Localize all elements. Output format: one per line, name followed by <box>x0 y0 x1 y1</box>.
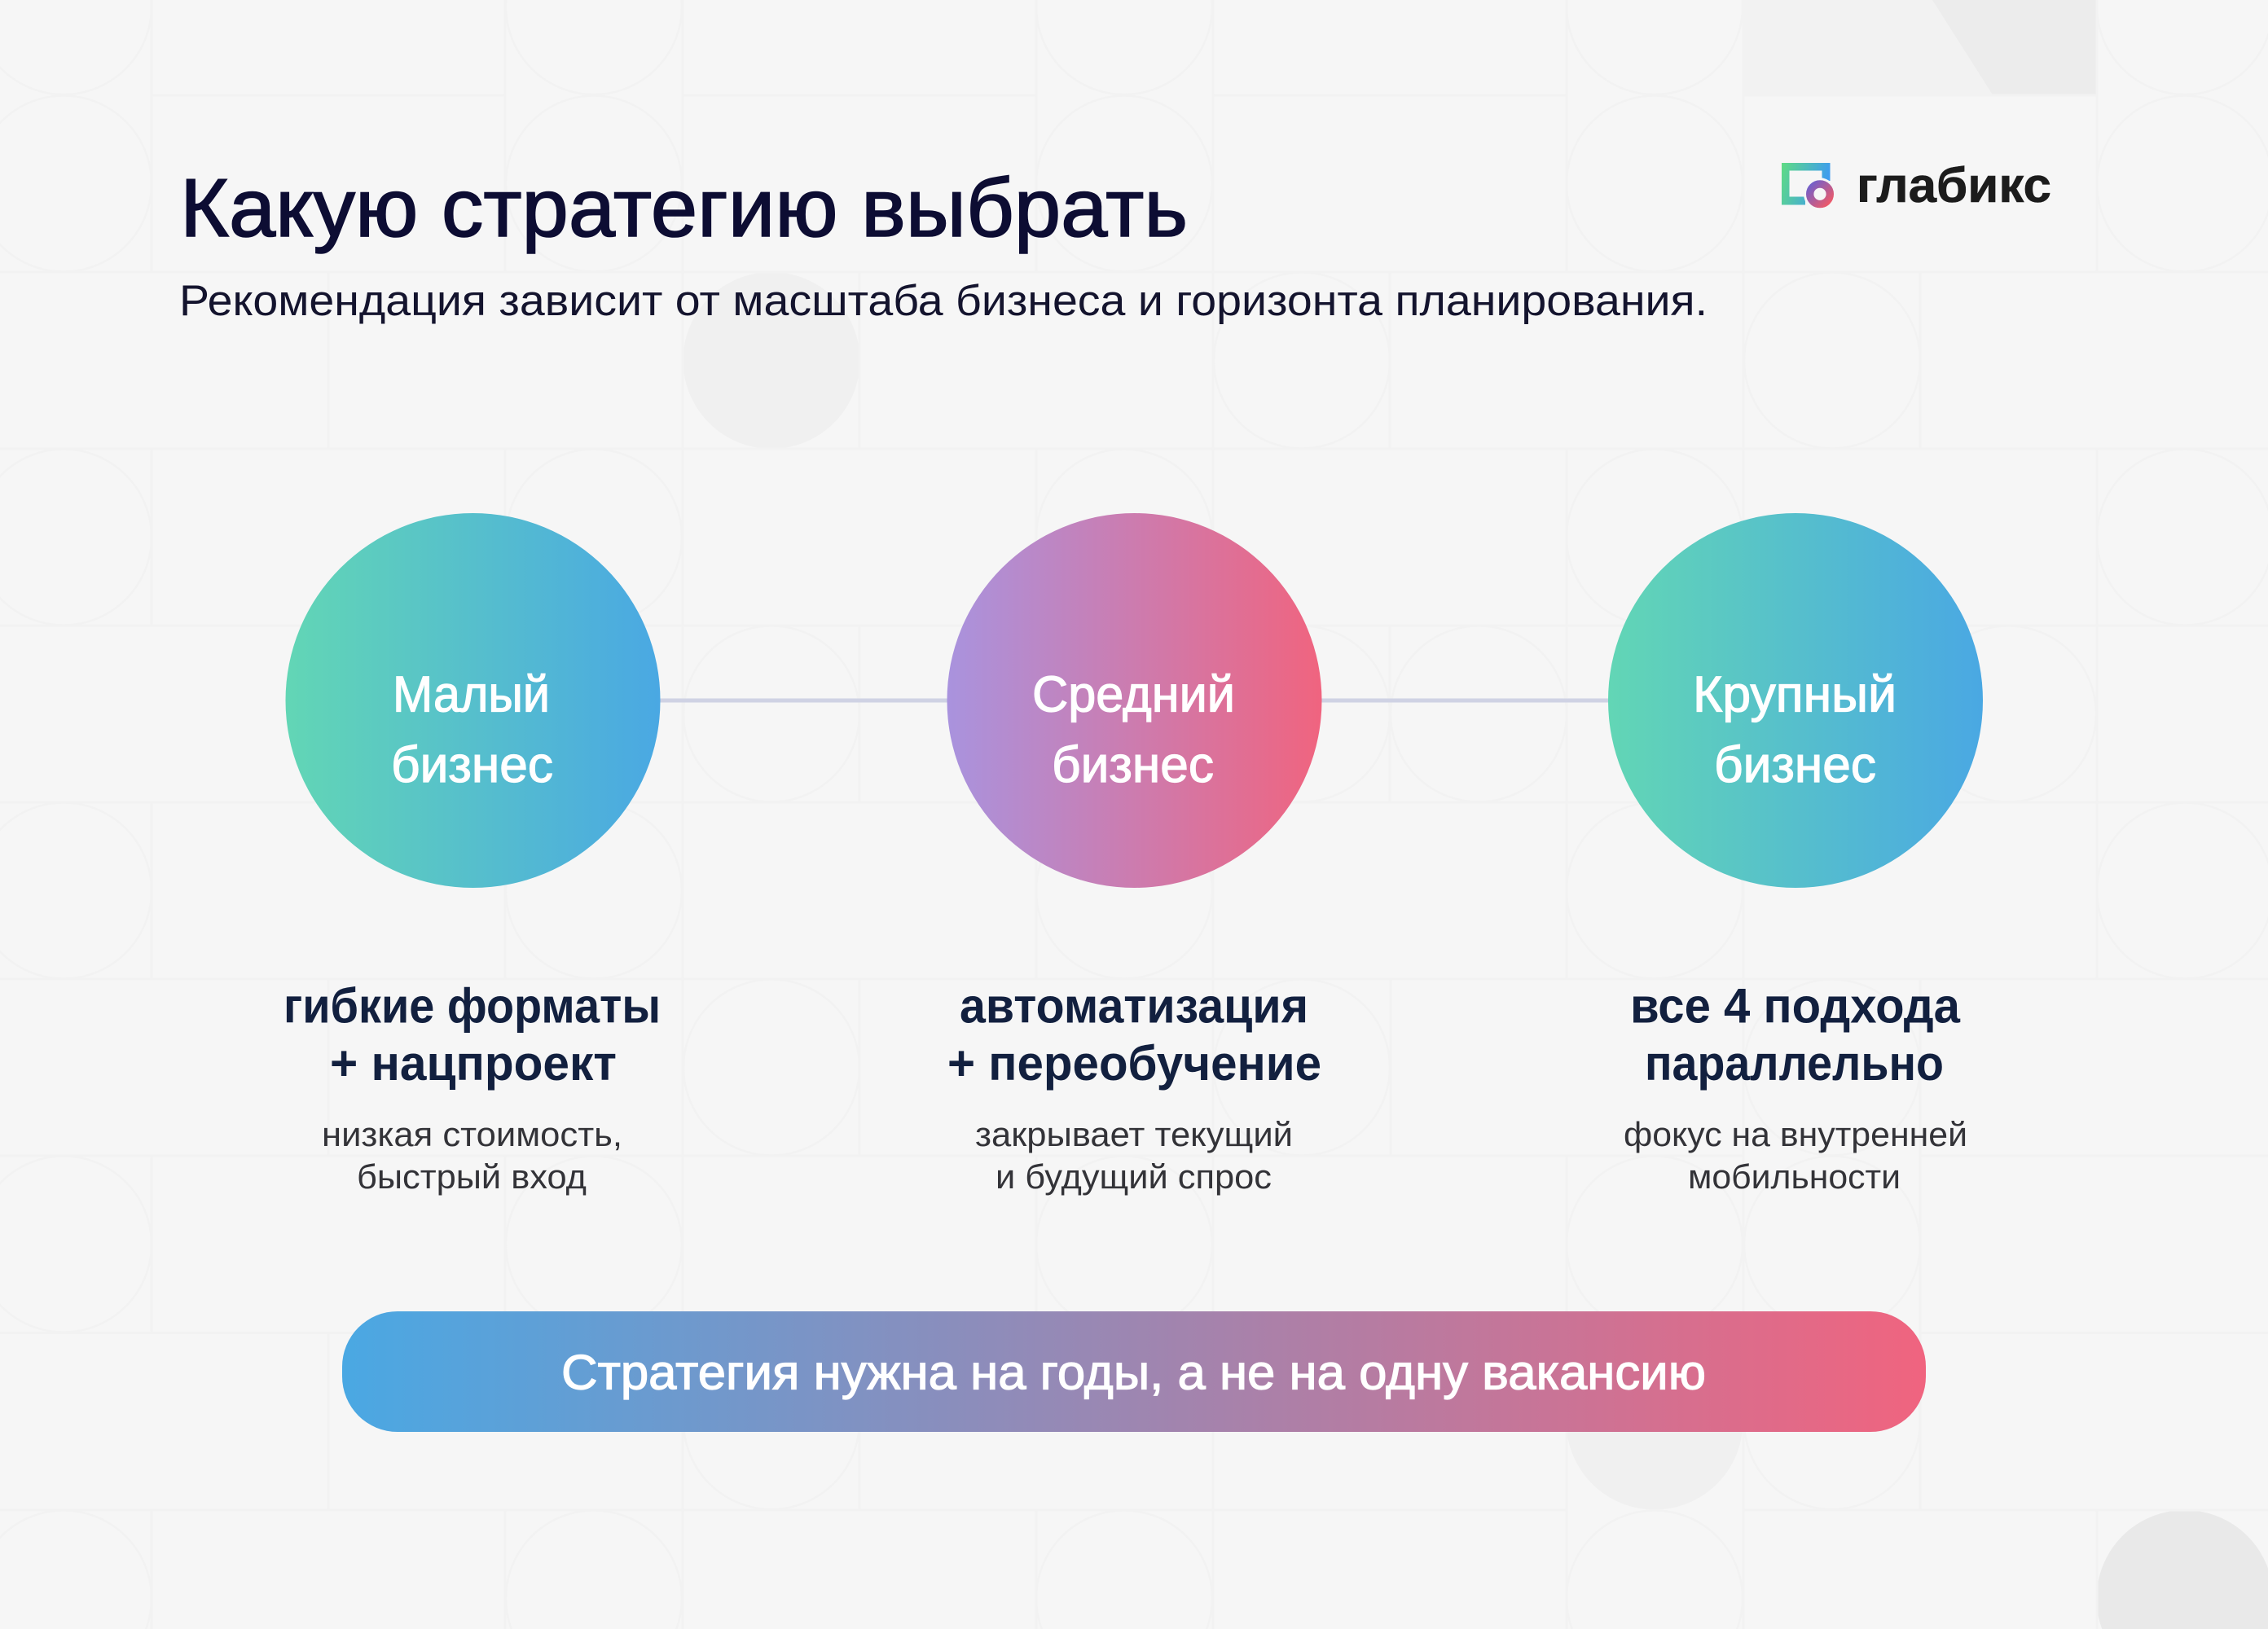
recommendation note: закрывает текущий <box>975 1115 1293 1153</box>
recommendation heading: + переобучение <box>947 1036 1321 1091</box>
recommendation note: и будущий спрос <box>996 1157 1272 1196</box>
icon: logo mark <box>1782 163 1836 210</box>
recommendation note: мобильности <box>1688 1157 1901 1196</box>
recommendation heading: автоматизация <box>960 979 1308 1033</box>
circle label: бизнес <box>1714 737 1876 793</box>
recommendation heading: + нацпроект <box>330 1036 617 1091</box>
subtitle: Рекомендация зависит от масштаба бизнеса и горизонта планирования. <box>179 277 1708 325</box>
panel: medium business <box>947 513 1321 1196</box>
circle label: бизнес <box>391 737 553 793</box>
circle label: Малый <box>393 666 550 723</box>
circle: medium business <box>947 513 1321 888</box>
circle: small business <box>285 513 660 888</box>
logo <box>1782 158 2051 213</box>
callout bar: Стратегия нужна на годы, а не на одну вакансию <box>561 1346 1706 1399</box>
circle label: Средний <box>1032 666 1235 723</box>
circle label: бизнес <box>1052 737 1214 793</box>
connector lines <box>660 699 1608 702</box>
recommendation heading: параллельно <box>1645 1036 1944 1091</box>
panel: large business <box>1608 513 1983 1196</box>
circle: large business <box>1608 513 1983 888</box>
recommendation heading: все 4 подхода <box>1630 979 1961 1033</box>
logo wordmark: глабикс <box>1857 158 2051 213</box>
recommendation note: фокус на внутренней <box>1624 1115 1967 1153</box>
callout bar <box>342 1311 1926 1432</box>
title: Какую стратегию выбрать <box>180 163 1188 254</box>
circle label: Крупный <box>1693 666 1897 723</box>
recommendation heading: гибкие форматы <box>284 979 661 1033</box>
recommendation note: низкая стоимость, <box>322 1115 622 1153</box>
recommendation note: быстрый вход <box>357 1157 587 1196</box>
panel: small business <box>284 513 661 1196</box>
